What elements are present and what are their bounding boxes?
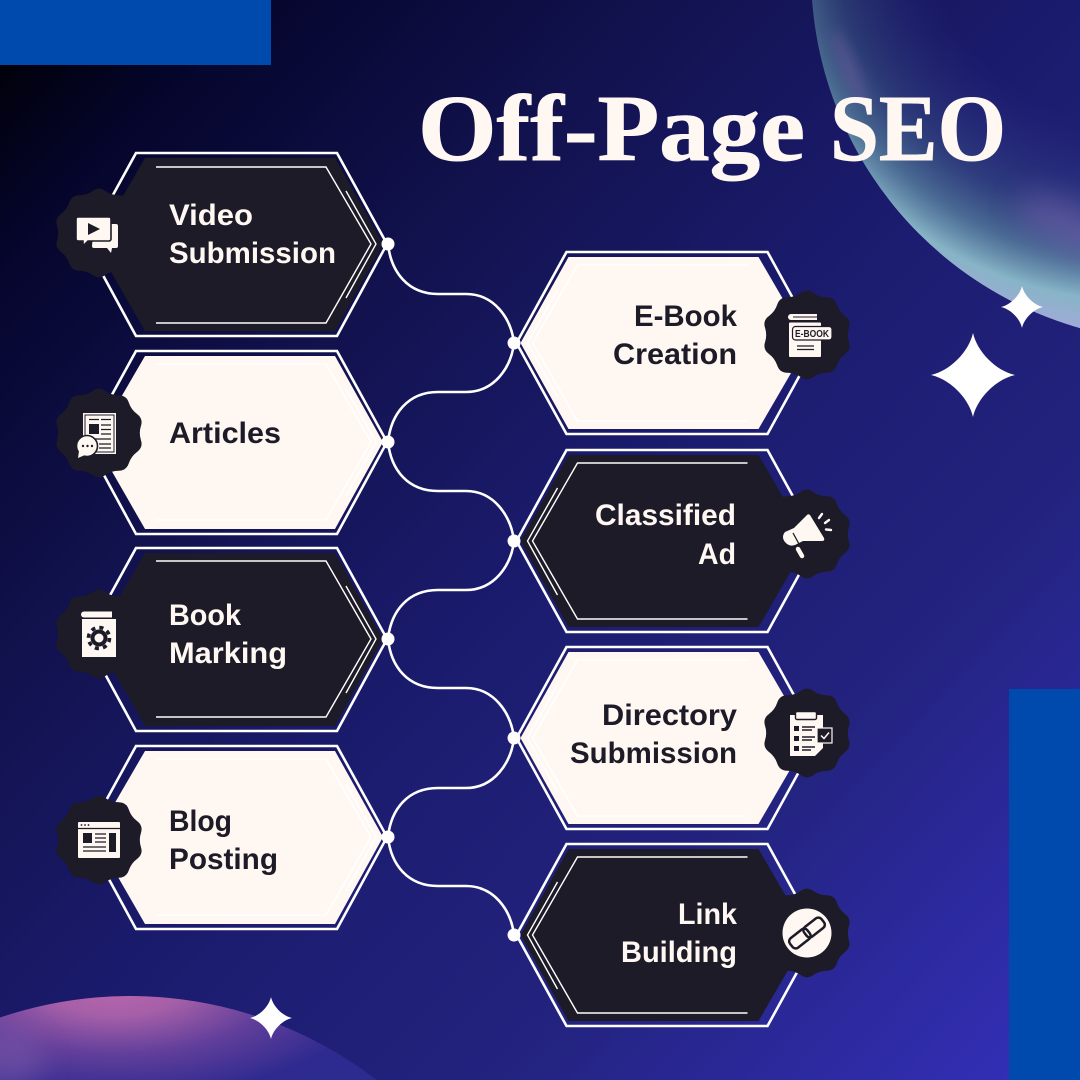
label: Classified Ad [595, 499, 736, 571]
label: E-Book Creation [613, 300, 737, 371]
badge: browser icon [44, 786, 154, 894]
bottom-left purple sphere [0, 990, 380, 1080]
badge: checklist icon [752, 679, 862, 787]
label: Book Marking: Book [169, 599, 241, 632]
label: Classified Ad: Classified [595, 499, 736, 532]
small sparkle bottom [250, 997, 292, 1039]
label: Articles: Articles [169, 417, 281, 450]
title: SEO [830, 77, 1006, 181]
panel: Link Building [508, 844, 862, 1026]
label: Book Marking: Marking [169, 637, 287, 670]
panel: Video Submission [44, 153, 394, 336]
connector dot [508, 336, 520, 350]
connector dot [382, 632, 394, 646]
label: Video Submission: Video [169, 199, 253, 232]
label: Classified Ad: Ad [698, 538, 736, 571]
hexagon: dark [516, 844, 818, 1026]
connector dot [382, 436, 394, 448]
label: Blog Posting [169, 805, 278, 876]
label: Directory Submission: Submission [570, 737, 737, 770]
connector lines [388, 244, 514, 935]
label: Video Submission: Submission [169, 237, 336, 270]
top-right glowing sphere [811, 0, 1080, 342]
label: Blog Posting: Posting [169, 843, 278, 876]
small sparkle top right [1001, 286, 1043, 328]
badge: video icon [44, 179, 154, 287]
label: E-Book Creation: E-Book [634, 300, 737, 333]
label: Blog Posting: Blog [169, 805, 232, 838]
connector dot [382, 830, 394, 844]
right blue rectangle [1009, 689, 1080, 1080]
hexagon: dark [516, 450, 818, 632]
label: Link Building [621, 898, 737, 969]
hexagon: cream [516, 252, 818, 434]
label: Directory Submission [570, 699, 737, 770]
panel: Classified Ad [508, 450, 862, 632]
label: E-Book Creation: Creation [613, 338, 737, 371]
panel: Articles [44, 351, 394, 534]
panel: Directory Submission [508, 647, 862, 829]
hexagon: cream [86, 746, 387, 929]
label: Book Marking [169, 599, 287, 670]
panel: Blog Posting [44, 746, 394, 929]
label: Directory Submission: Directory [602, 699, 737, 732]
hexagon: cream [86, 351, 387, 534]
badge: chain link icon [752, 879, 862, 987]
hexagon: dark [86, 548, 387, 731]
connector dot [508, 928, 520, 942]
large sparkle [931, 333, 1015, 417]
label: Video Submission [169, 199, 336, 270]
connector dot [508, 534, 520, 548]
badge: megaphone icon [752, 480, 862, 588]
label: Link Building: Building [621, 936, 737, 969]
connector dot [382, 238, 394, 250]
label: Link Building: Link [678, 898, 737, 931]
panel: E-Book Creation [508, 252, 862, 434]
top-left blue rectangle [0, 0, 271, 65]
badge: e-book icon [752, 281, 862, 389]
connector dot [508, 732, 520, 744]
badge: gear book icon [44, 580, 154, 688]
hexagon: cream [516, 647, 818, 829]
hexagon: dark [86, 153, 387, 336]
title: Off-Page [418, 77, 805, 181]
badge: e-book icon: E-BOOK [795, 328, 829, 340]
panel: Book Marking [44, 548, 394, 731]
badge: article icon [44, 379, 154, 487]
title [418, 77, 1006, 181]
